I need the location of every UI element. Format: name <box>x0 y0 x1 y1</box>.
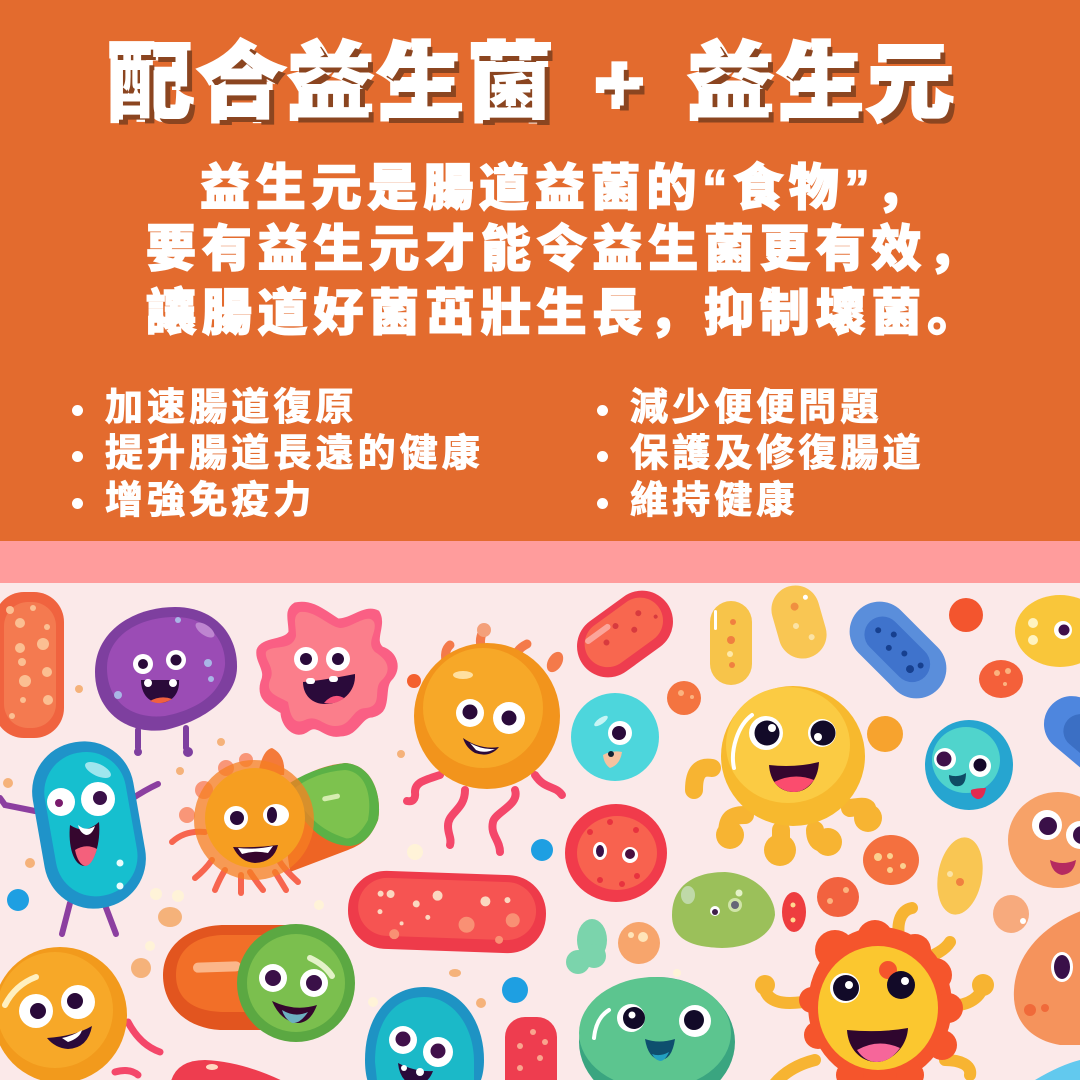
small round cells <box>618 598 1029 964</box>
benefits list: right column: 保護及修復腸道 <box>630 433 925 475</box>
benefits list: right column: 維持健康 <box>630 480 798 522</box>
bacterium: yellow sun with red rim <box>755 908 994 1080</box>
blue dots <box>7 839 553 1003</box>
benefits list: right column <box>597 387 925 522</box>
illustration: cartoon bacteria <box>0 586 1080 1080</box>
bacterium: orange-red pill <box>0 592 64 738</box>
intro text: 益生元是腸道益菌的“食物”， <box>200 160 931 216</box>
title: 配合益生菌 <box>110 39 560 130</box>
bacterium: cyan <box>571 693 659 781</box>
intro text <box>146 160 983 341</box>
bacterium: orange bottom-left face <box>0 947 160 1080</box>
bacterium: long red pill <box>347 870 547 954</box>
benefits list: left column: 提升腸道長遠的健康 <box>105 433 484 475</box>
bacterium: light blue corner <box>1035 1060 1080 1080</box>
bacterium: big green face <box>579 977 735 1080</box>
bacterium: yellow pills <box>710 580 832 685</box>
bacterium: orange edge face <box>1008 792 1080 888</box>
title: + <box>596 40 643 129</box>
bacterium: orange bottom-right <box>1014 908 1080 1045</box>
bacterium: small mint blob <box>566 919 607 974</box>
bacterium: yellow smiling <box>694 686 882 866</box>
bacterium: yellow edge <box>1015 595 1080 667</box>
benefits list: right column: 減少便便問題 <box>630 387 883 429</box>
bacterium: red bottom pills <box>170 1017 557 1080</box>
benefits list: left column: 增強免疫力 <box>105 480 316 522</box>
title <box>109 36 960 130</box>
panel: orange header <box>0 0 1080 541</box>
bacterium: green <box>672 872 775 948</box>
benefits list: left column <box>72 386 484 522</box>
title: 益生元 <box>690 39 960 130</box>
bacterium: purple <box>95 607 237 757</box>
bacterium: orange with red tentacles <box>407 623 567 852</box>
bacterium: blue edge <box>1033 685 1080 798</box>
bacterium: pink splat <box>258 603 396 735</box>
bacterium: orange sun with green capsule <box>172 748 379 893</box>
bacterium: teal bottom face <box>365 987 484 1080</box>
intro text: 要有益生元才能令益生菌更有效， <box>146 221 983 277</box>
pink divider band <box>0 541 1080 583</box>
bacterium: teal <box>925 720 1013 810</box>
benefits list: left column: 加速腸道復原 <box>105 387 358 429</box>
intro text: 讓腸道好菌茁壯生長，抑制壞菌。 <box>146 285 983 341</box>
bacterium: blue smiling pill <box>0 733 158 934</box>
specks <box>3 685 486 1080</box>
bacterium: red round face <box>565 804 667 902</box>
bacterium: orange and green capsule <box>163 924 355 1042</box>
bacterium: red tilted pill <box>565 578 685 690</box>
bacterium: blue pill <box>837 589 959 711</box>
